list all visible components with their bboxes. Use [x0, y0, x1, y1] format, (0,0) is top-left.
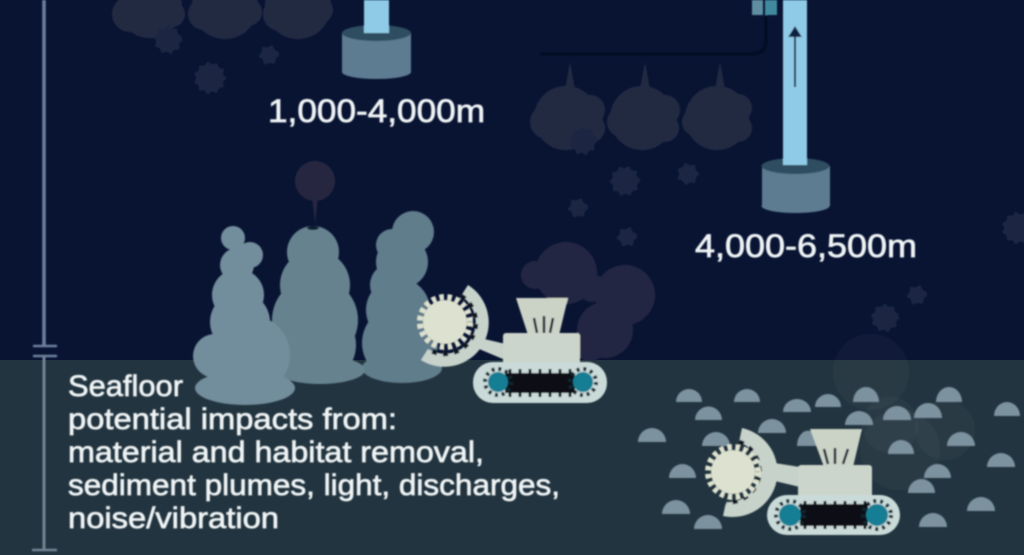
right seabed mining machine	[708, 428, 900, 535]
seafloor plume cloud	[833, 334, 975, 490]
body	[798, 465, 872, 501]
track wheels	[776, 501, 891, 529]
panel: seafloor band	[0, 360, 1024, 555]
vent opening	[307, 226, 319, 230]
track	[473, 362, 607, 403]
mid-water plume clouds	[521, 242, 655, 361]
vent plume above sediment	[295, 161, 335, 224]
pipe: left riser	[342, 0, 411, 79]
pump boxes	[752, 0, 777, 15]
pipe: right riser with upward arrow	[762, 0, 830, 213]
seafloor impacts text: potential impacts from:	[68, 403, 397, 436]
cutter arm	[421, 285, 489, 367]
arrow	[790, 28, 800, 87]
depth label: 1,000-4,000m	[268, 93, 485, 129]
cutter gear	[420, 297, 470, 347]
cutter arm	[723, 428, 778, 517]
left seabed mining machine	[420, 285, 607, 403]
depth scale	[32, 0, 57, 550]
track wheels	[485, 369, 596, 395]
seafloor impacts text: sediment plumes, light, discharges,	[68, 469, 560, 502]
seafloor impacts text: Seafloor	[68, 370, 183, 403]
background: deep water	[0, 0, 1024, 360]
body	[503, 333, 580, 375]
depth label: 4,000-6,500m	[695, 228, 917, 264]
cutter gear	[708, 447, 758, 497]
seafloor impacts text	[68, 370, 560, 535]
hopper	[810, 429, 862, 467]
seafloor impacts text: noise/vibration	[68, 502, 279, 535]
sediment plume towers	[193, 211, 442, 405]
hopper	[516, 298, 568, 335]
seafloor impacts text: material and habitat removal,	[68, 436, 484, 469]
small drifting particles, upper left	[156, 28, 277, 92]
small drifting particles, right	[570, 129, 1024, 330]
track	[767, 495, 900, 535]
manganese nodules	[638, 387, 1020, 529]
right discharge plumes	[530, 62, 752, 150]
discharge pipe	[540, 15, 766, 54]
upper left discharge plumes	[112, 0, 333, 39]
